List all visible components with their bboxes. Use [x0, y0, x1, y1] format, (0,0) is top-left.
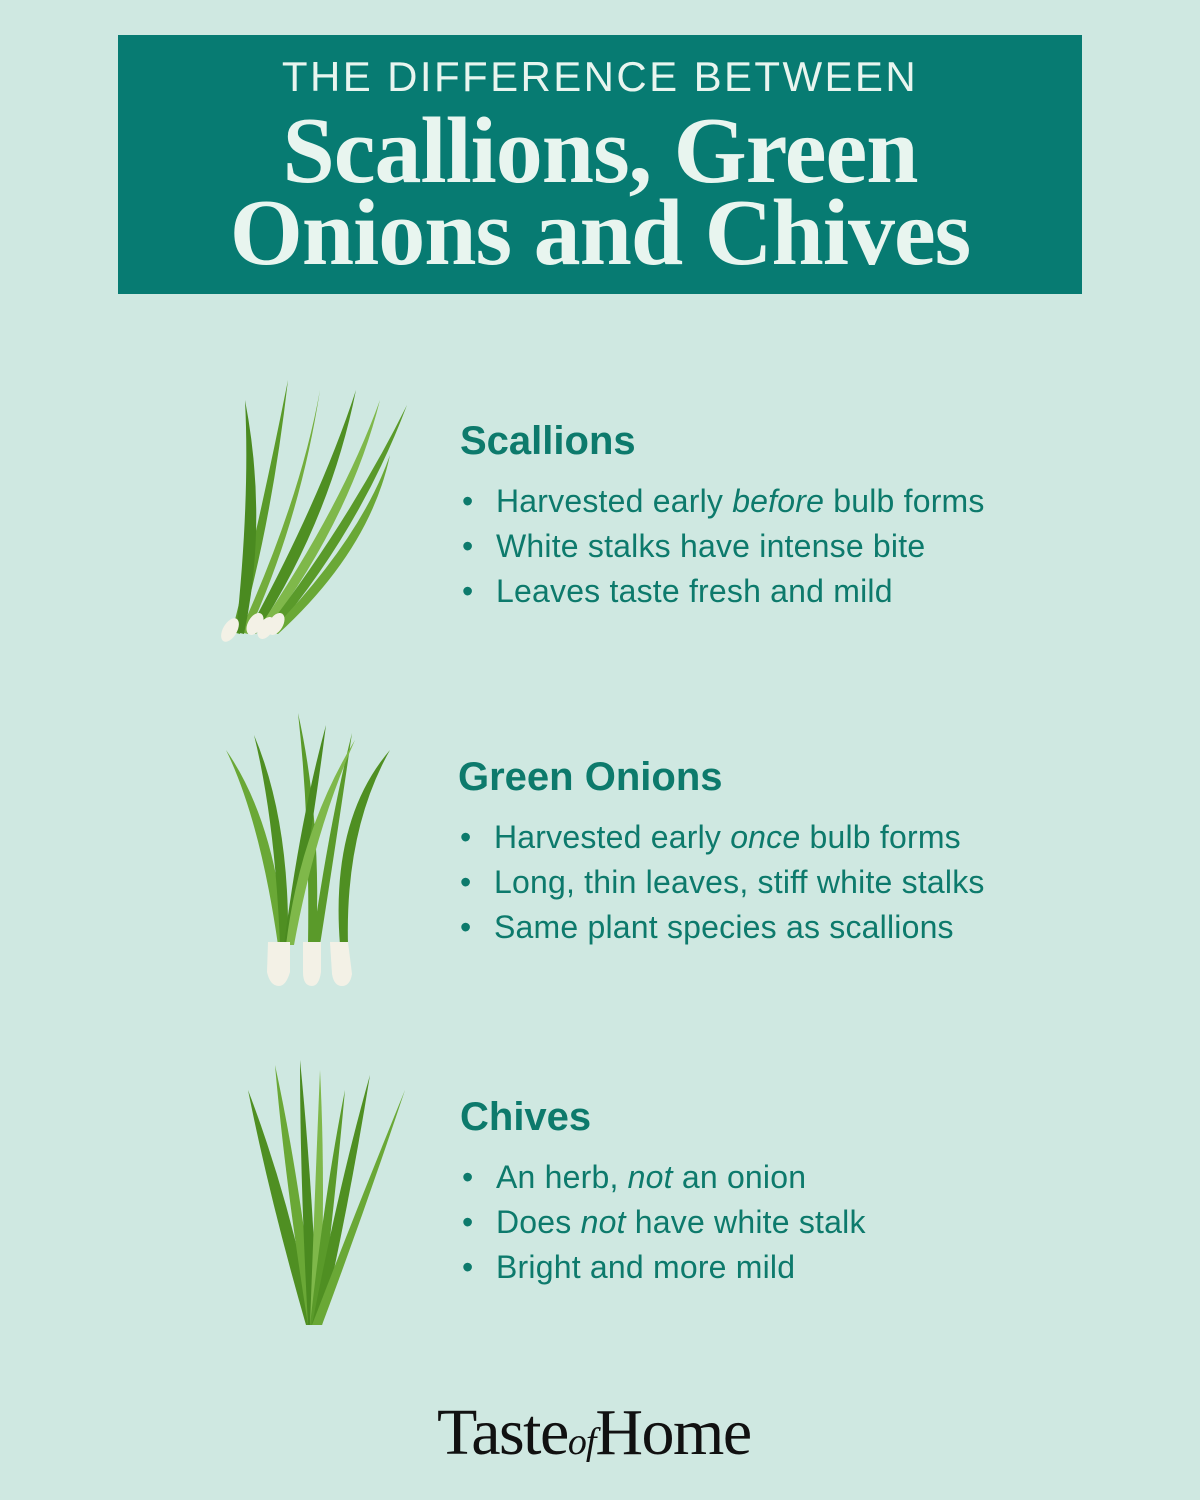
icon: green onions [226, 713, 390, 986]
bullets: chives: Does not have white stalk [496, 1204, 866, 1240]
icon: scallions [217, 380, 407, 645]
bullets: green onions: Harvested early once bulb forms [494, 819, 961, 855]
subtitle: THE DIFFERENCE BETWEEN [282, 53, 918, 100]
icon: chives [248, 1060, 405, 1325]
main title: Onions and Chives [230, 181, 970, 285]
bullets: chives [463, 1159, 866, 1285]
bullets: chives: An herb, not an onion [496, 1159, 806, 1195]
bullets: scallions: Leaves taste fresh and mild [496, 573, 893, 609]
heading: scallions: Scallions [460, 419, 636, 463]
panel: chives text [460, 1095, 866, 1285]
bullets: scallions [463, 483, 985, 609]
main title [230, 99, 970, 285]
bullets: green onions [461, 819, 985, 945]
bullets: scallions: Harvested early before bulb forms [496, 483, 985, 519]
logo: TasteofHome [437, 1396, 751, 1469]
main title: Scallions, Green [282, 99, 918, 203]
heading: green onions: Green Onions [458, 755, 722, 799]
panel: green onions text [458, 755, 985, 945]
heading: chives: Chives [460, 1095, 591, 1139]
header banner [118, 35, 1082, 294]
bullets: scallions: White stalks have intense bite [496, 528, 925, 564]
panel: scallions text [460, 419, 985, 609]
bullets: green onions: Long, thin leaves, stiff white stalks [494, 864, 985, 900]
bullets: green onions: Same plant species as scallions [494, 909, 954, 945]
bullets: chives: Bright and more mild [496, 1249, 795, 1285]
